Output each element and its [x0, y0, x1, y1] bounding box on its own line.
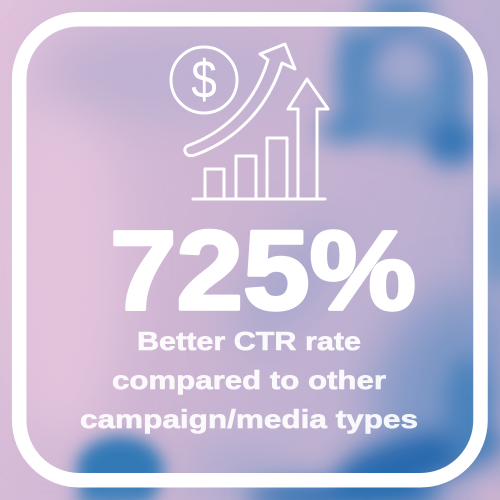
icon: bars [205, 138, 287, 199]
icon: up arrow [288, 79, 328, 199]
icon: curved growth arrow [185, 44, 295, 156]
description text: campaign/media types [80, 404, 418, 434]
icon: dollar coin: $ [191, 50, 217, 110]
description text [80, 326, 418, 434]
big number: 725% [110, 208, 416, 333]
description text: compared to other [112, 365, 386, 395]
icon: baseline [193, 198, 325, 200]
icon: growth chart with dollar coin [171, 44, 328, 199]
icon: dollar coin [171, 47, 237, 113]
description text: Better CTR rate [137, 326, 361, 356]
